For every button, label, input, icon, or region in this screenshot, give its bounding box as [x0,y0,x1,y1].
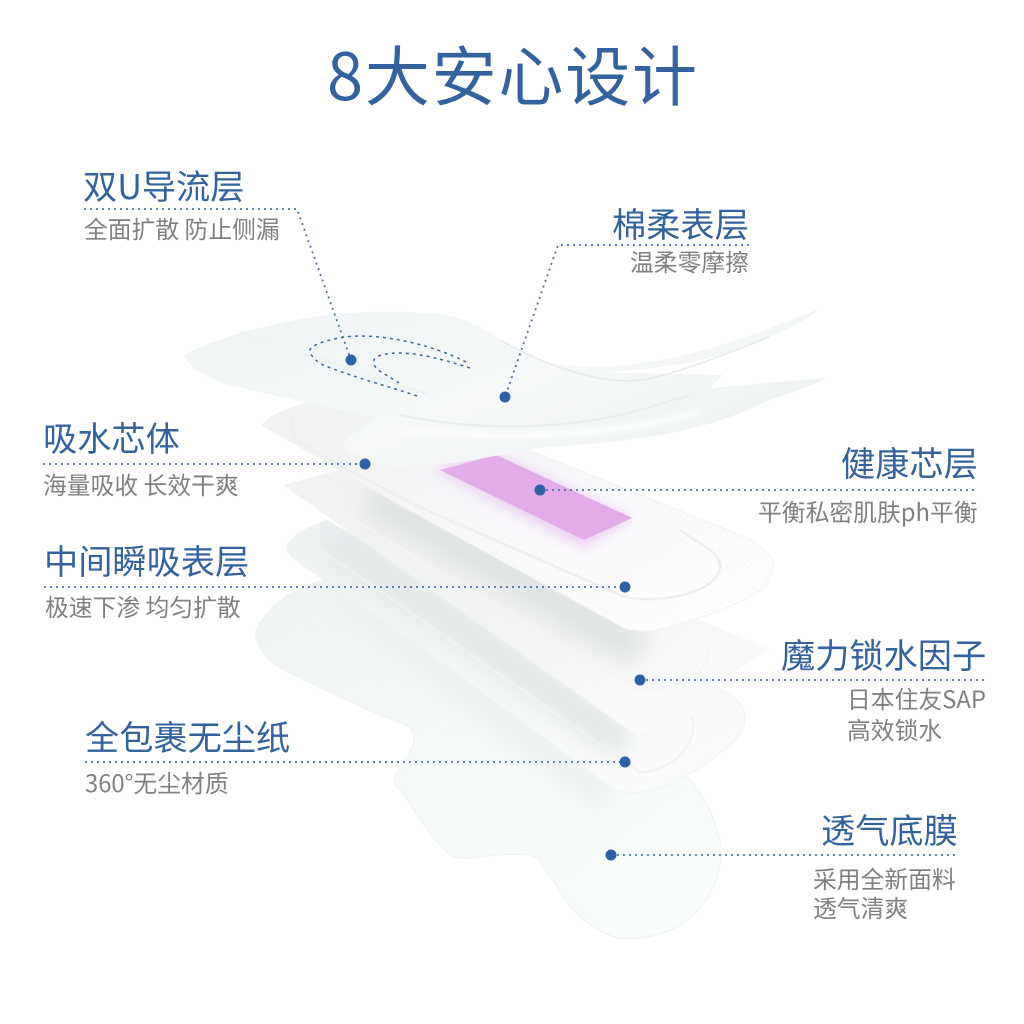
label: 魔力锁水因子 [634,628,986,746]
label: 透气底膜: 采用全新面料 [813,860,956,895]
label: 吸水芯体: 吸水芯体 [43,411,180,461]
layer: magic water-lock factor [284,470,716,734]
label: 双U导流层: 双U导流层 [83,159,244,209]
label: 双U导流层 [83,159,356,366]
label: 透气底膜: 透气底膜 [821,803,958,853]
label: 棉柔表层: 棉柔表层 [612,197,749,247]
label: 双U导流层: 全面扩散 防止侧漏 [84,210,280,245]
layer: instant-absorption middle sheet and core [262,403,773,631]
label: 健康芯层 [534,436,978,528]
label: 棉柔表层 [500,197,749,402]
title: 8大安心设计 [327,25,697,119]
label: 全包裹无尘纸: 360°无尘材质 [85,764,229,799]
label: 中间瞬吸表层: 极速下渗 均匀扩散 [45,588,241,623]
label: 中间瞬吸表层: 中间瞬吸表层 [44,534,249,584]
layer: soft cotton top sheet [184,308,826,468]
label: 健康芯层: 健康芯层 [841,436,978,486]
layer: breathable bottom film [255,578,721,938]
label: 透气底膜: 透气清爽 [813,889,908,924]
label: 魔力锁水因子: 高效锁水 [847,711,942,746]
label: 全包裹无尘纸: 全包裹无尘纸 [85,710,290,760]
label: 棉柔表层: 温柔零摩擦 [630,243,749,278]
label: 全包裹无尘纸 [85,710,630,799]
core: purple strip [432,455,632,548]
label: 中间瞬吸表层 [44,534,630,623]
label: 透气底膜 [606,803,958,924]
label: 健康芯层: 平衡私密肌肤ph平衡 [758,493,978,528]
label: 魔力锁水因子: 日本住友SAP [847,680,986,715]
label: 吸水芯体 [43,411,370,501]
label: 魔力锁水因子: 魔力锁水因子 [781,628,986,678]
layer: full-wrap dust-free paper [287,520,745,793]
double U channel [310,336,470,397]
label: 吸水芯体: 海量吸收 长效干爽 [43,466,239,501]
